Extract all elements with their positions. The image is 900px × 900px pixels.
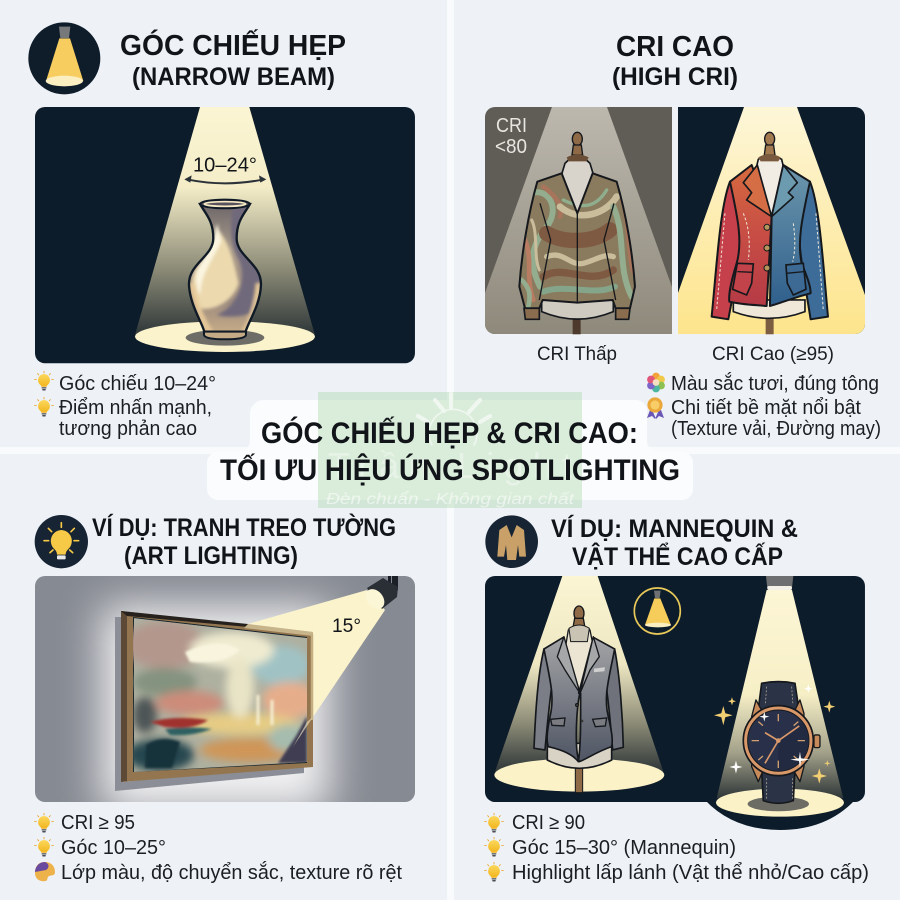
illustration: low CRI blouse — [485, 107, 672, 334]
heading: mannequin: VẬT THỂ CAO CẤP — [572, 541, 783, 571]
heading: góc chiếu hẹp — [120, 28, 346, 91]
lamp — [766, 576, 793, 588]
light beam — [244, 590, 385, 747]
watermark: Đèn chuẩn - Không gian chất — [326, 491, 575, 508]
angle label — [184, 155, 266, 183]
heading: CRI cao: CRI CAO — [616, 31, 734, 63]
vase — [187, 200, 267, 339]
heading: mannequin — [551, 514, 798, 571]
icon: light bulb circle — [35, 515, 88, 568]
icon: colour flower — [647, 373, 665, 392]
icon: spotlight circle — [28, 22, 100, 94]
sparkles — [714, 684, 835, 784]
bullet list: Highlight lấp lánh (Vật thể nhỏ/Cao cấp) — [512, 862, 869, 884]
watermark — [318, 392, 582, 508]
watch beam — [714, 590, 844, 817]
bullet list: CRI ≥ 90 — [512, 812, 585, 834]
illustration: low CRI blouse: <80 — [495, 136, 527, 158]
bullet list: Góc 10–25° — [61, 837, 166, 859]
bullet list — [647, 372, 881, 440]
icon: blazer circle — [485, 515, 538, 568]
heading: tranh treo tường — [92, 512, 396, 570]
illustration: mannequin and watch — [485, 576, 865, 830]
bullet list: CRI ≥ 95 — [61, 812, 135, 834]
panel: mannequin and luxury objects — [454, 454, 900, 900]
panel: high CRI — [454, 0, 900, 447]
illustration: low CRI blouse: CRI — [496, 115, 527, 137]
main title: GÓC CHIẾU HẸP & CRI CAO: — [261, 416, 638, 450]
heading: góc chiếu hẹp: (NARROW BEAM) — [132, 63, 335, 91]
heading: mannequin: VÍ DỤ: MANNEQUIN & — [551, 514, 798, 543]
painting — [125, 618, 318, 772]
caption: CRI cao: CRI Cao (≥95) — [712, 344, 834, 365]
bullet list: Chi tiết bề mặt nổi bật — [671, 397, 861, 419]
main title — [220, 416, 680, 487]
mannequin beam — [494, 576, 664, 793]
heading: CRI cao — [612, 31, 738, 91]
bullet list: Góc 15–30° (Mannequin) — [512, 837, 736, 859]
central title banner — [207, 392, 693, 508]
bullet list — [35, 812, 402, 884]
angle label: 10–24° — [193, 155, 257, 177]
angle label: 15° — [332, 616, 361, 637]
lamp — [366, 576, 398, 609]
heading: tranh treo tường: VÍ DỤ: TRANH TREO TƯỜNG — [92, 512, 396, 542]
icon: palette — [35, 862, 55, 881]
illustration: vase in narrow beam — [35, 107, 415, 363]
heading: tranh treo tường: (ART LIGHTING) — [124, 542, 298, 570]
icon: medal — [647, 397, 664, 419]
bullet list — [35, 371, 216, 440]
watch — [743, 682, 820, 803]
panel: narrow beam — [0, 0, 447, 447]
main title: TỐI ƯU HIỆU ỨNG SPOTLIGHTING — [220, 453, 680, 487]
bullet list: (Texture vải, Đường may) — [671, 418, 881, 440]
watermark: Trần Light — [328, 445, 572, 486]
bullet list: Lớp màu, độ chuyển sắc, texture rõ rệt — [61, 861, 402, 884]
bullet list: Góc chiếu 10–24° — [59, 373, 216, 395]
panel: art lighting — [0, 454, 447, 900]
heading: góc chiếu hẹp: GÓC CHIẾU HẸP — [120, 28, 346, 62]
bullet list: tương phản cao — [59, 418, 197, 440]
icon: spotlight badge — [634, 588, 680, 634]
frame — [121, 611, 313, 782]
illustration: framed painting with spotlight — [35, 576, 415, 811]
heading: CRI cao: (HIGH CRI) — [612, 63, 738, 91]
bullet list: Điểm nhấn mạnh, — [59, 397, 212, 419]
illustration: high CRI jacket — [678, 107, 865, 334]
bullet list — [485, 812, 869, 884]
bullet list: Màu sắc tươi, đúng tông — [671, 372, 879, 395]
caption: CRI thấp: CRI Thấp — [537, 344, 617, 365]
